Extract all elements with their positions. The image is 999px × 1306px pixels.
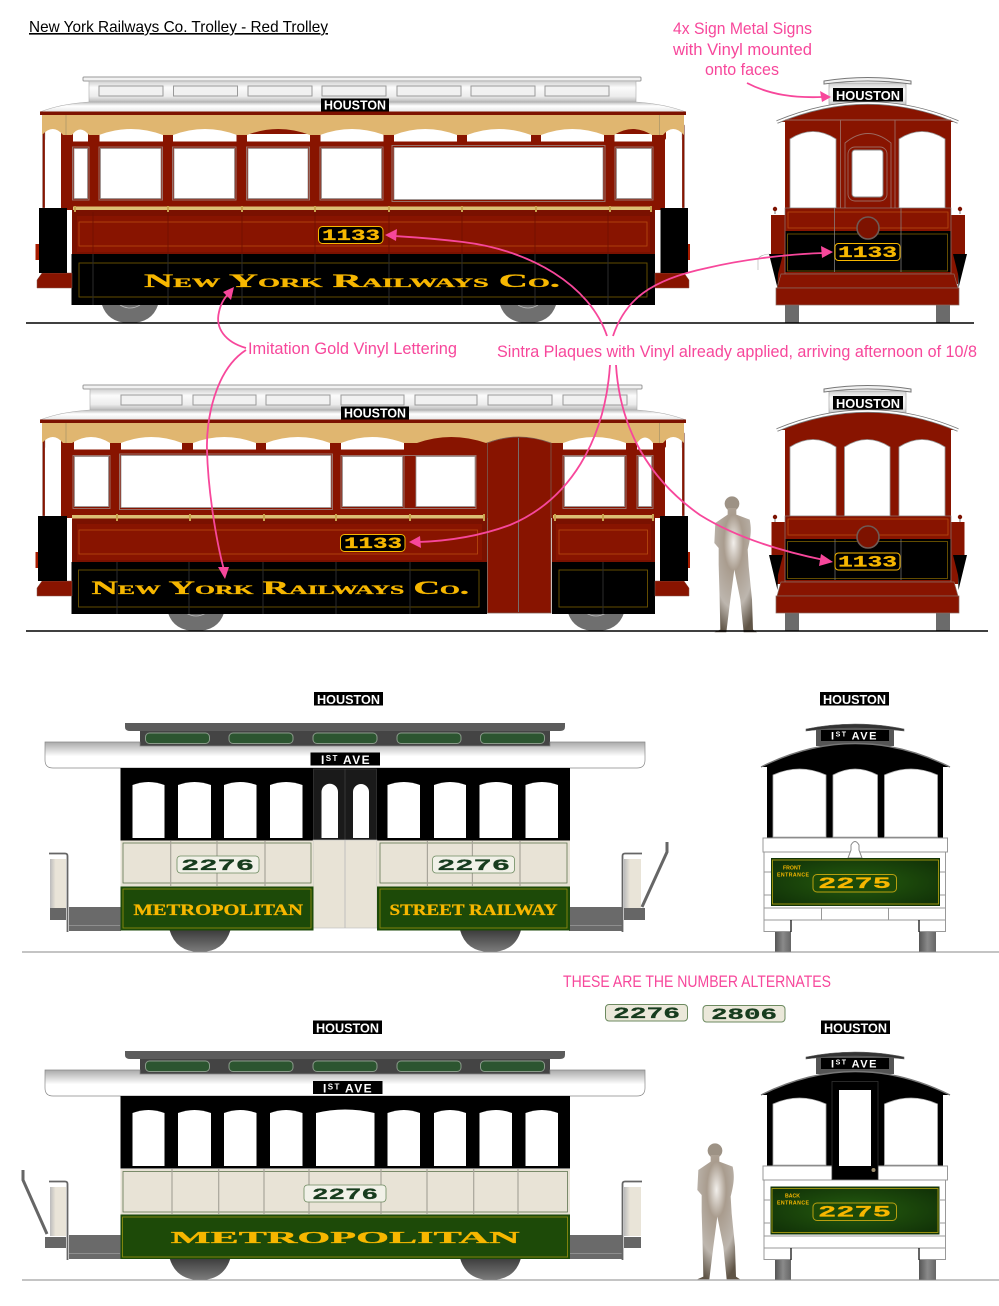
valance bbox=[42, 423, 684, 443]
alternate plaque 2806 bbox=[703, 1006, 785, 1024]
sign above: HOUSTON bbox=[316, 1022, 379, 1036]
route sign: ST bbox=[326, 754, 339, 763]
panel seams bbox=[93, 212, 608, 305]
green panel bbox=[771, 858, 940, 906]
body wall and open platforms bbox=[42, 115, 684, 210]
windows bbox=[790, 440, 945, 516]
figure: human scale 2 bbox=[697, 1143, 740, 1279]
arrow: plaque side 2 bbox=[409, 365, 610, 548]
black wall bbox=[761, 744, 950, 838]
black name panels bbox=[72, 562, 655, 614]
roof cap: AVE bbox=[848, 1058, 878, 1070]
end door bbox=[785, 120, 951, 208]
legs bbox=[785, 613, 950, 631]
route sign: ST bbox=[328, 1082, 341, 1092]
lettering: STREET RAILWAY bbox=[390, 902, 558, 919]
ground line 3 bbox=[22, 951, 999, 953]
route sign: I bbox=[323, 1082, 328, 1096]
roof cap: AVE bbox=[848, 730, 878, 742]
green trolley 1 front view bbox=[761, 692, 950, 952]
number plaque bbox=[813, 1203, 896, 1222]
green trolley 2 front view bbox=[761, 1020, 950, 1280]
number plaque: 2276 bbox=[312, 1186, 378, 1204]
arrows bbox=[207, 83, 833, 579]
valance bbox=[42, 115, 684, 135]
letter board panels bbox=[72, 518, 655, 562]
arrow: lettering upper bbox=[218, 287, 246, 348]
ground line 1 bbox=[26, 322, 974, 324]
wheels bbox=[170, 930, 521, 952]
metal sign: HOUSTON bbox=[836, 88, 900, 103]
legs bbox=[785, 305, 950, 323]
red trolley 1 front view bbox=[758, 78, 967, 323]
center door lower bbox=[313, 840, 377, 928]
alternate plaque 2276: 2276 bbox=[613, 1005, 680, 1023]
company lettering: New York Railways Co. bbox=[92, 579, 469, 599]
ground line 2 bbox=[26, 630, 988, 632]
wall bbox=[779, 104, 956, 208]
windows bbox=[773, 769, 938, 837]
green panel bbox=[770, 1186, 940, 1234]
bumper bbox=[776, 274, 959, 305]
label: sintra plaques: Sintra Plaques with Vinyl already applied, arriving afternoon of 10/8 bbox=[497, 343, 977, 361]
roof cap: I bbox=[831, 1058, 836, 1070]
clerestory bbox=[140, 1059, 550, 1074]
green trolley 1 side view bbox=[45, 692, 667, 952]
green trolley 2 side view bbox=[23, 1020, 645, 1280]
letter board panel bbox=[72, 210, 655, 254]
wheels bbox=[170, 1258, 521, 1280]
platform frames bbox=[49, 842, 667, 932]
sign above: HOUSTON bbox=[823, 693, 886, 707]
windows bbox=[773, 1098, 938, 1165]
roof cap: I bbox=[831, 730, 836, 742]
wheels bbox=[168, 613, 624, 631]
sign above: HOUSTON bbox=[317, 693, 380, 707]
green panel: ENTRANCE bbox=[777, 1200, 810, 1206]
roof cap: ST bbox=[836, 1060, 848, 1066]
brass rails bbox=[72, 514, 654, 521]
center door bbox=[488, 437, 551, 613]
sign above: HOUSTON bbox=[824, 1022, 887, 1036]
ground line 4 bbox=[22, 1279, 999, 1281]
roof cap bbox=[806, 1052, 904, 1074]
callout: metal signs note bbox=[672, 20, 812, 79]
alternate plaque 2806: 2806 bbox=[711, 1006, 777, 1024]
red trolley 1 side view bbox=[36, 77, 690, 323]
body wall and windows bbox=[42, 423, 684, 518]
lettering: METROPOLITAN bbox=[134, 902, 304, 919]
arrow: plaque side 1 bbox=[385, 229, 607, 336]
roof cap: ST bbox=[836, 732, 848, 738]
green panel bbox=[120, 1214, 570, 1259]
dash bbox=[769, 515, 967, 590]
number plaque bbox=[340, 534, 405, 553]
clerestory bbox=[140, 731, 550, 746]
white dash outlines bbox=[763, 838, 948, 932]
black window wall bbox=[120, 1096, 570, 1168]
bumper bbox=[776, 582, 959, 613]
black window wall bbox=[120, 768, 570, 840]
number plaque: 2275 bbox=[818, 875, 891, 893]
cream panel bbox=[120, 1169, 570, 1214]
cream panels bbox=[120, 840, 570, 886]
metal sign: HOUSTON bbox=[836, 396, 900, 411]
brass rail bbox=[73, 206, 652, 212]
company lettering: New York Railways Co. bbox=[144, 272, 560, 292]
wheels bbox=[102, 305, 556, 323]
route sign: I bbox=[321, 753, 326, 767]
dash bbox=[758, 207, 967, 288]
number plaque: 1133 bbox=[838, 244, 897, 262]
wall bbox=[779, 412, 956, 516]
roof sign: HOUSTON bbox=[324, 98, 386, 112]
route sign bbox=[313, 1081, 382, 1096]
arrow: lettering lower bbox=[207, 350, 246, 579]
callout: metal signs note: 4x Sign Metal Signs bbox=[673, 20, 812, 38]
white end openings bbox=[45, 133, 682, 208]
route sign: AVE bbox=[339, 753, 371, 767]
roof cap and clerestory bbox=[824, 78, 911, 107]
green panel: FRONT bbox=[783, 866, 802, 872]
red trolley 2 side view bbox=[36, 385, 690, 631]
roof cap bbox=[806, 724, 904, 746]
roof bbox=[45, 1070, 645, 1096]
number plaque: 2275 bbox=[818, 1204, 891, 1222]
end bumpers bbox=[36, 516, 690, 596]
black name panel bbox=[72, 254, 655, 305]
number plaque: 1133 bbox=[838, 554, 897, 572]
route sign bbox=[310, 752, 380, 767]
legs bbox=[775, 1248, 936, 1280]
label: imitation gold: Imitation Gold Vinyl Lettering bbox=[248, 340, 457, 358]
number plaque bbox=[304, 1185, 386, 1204]
route sign: AVE bbox=[341, 1082, 373, 1096]
red trolley 2 front view bbox=[769, 386, 967, 631]
green panel: BACK bbox=[785, 1194, 800, 1200]
number plaque: 1133 bbox=[322, 227, 380, 245]
green panels bbox=[120, 886, 570, 930]
roof cap and clerestory bbox=[824, 386, 911, 415]
number plaque bbox=[813, 874, 896, 893]
lettering: METROPOLITAN bbox=[171, 1228, 520, 1247]
white dash outlines bbox=[763, 1166, 948, 1260]
clerestory roof bbox=[40, 385, 686, 423]
ornament bbox=[848, 842, 862, 858]
clerestory roof bbox=[40, 77, 686, 115]
number plaque bbox=[318, 226, 383, 245]
roof bbox=[45, 742, 645, 768]
legs bbox=[775, 920, 936, 952]
white end openings bbox=[45, 441, 682, 516]
figure: human scale 1 bbox=[714, 496, 757, 632]
arrow: plaque front 1 bbox=[613, 246, 833, 336]
alternate plaque 2276 bbox=[606, 1004, 688, 1023]
number plaques: 2276 bbox=[437, 857, 510, 875]
green panel: ENTRANCE bbox=[777, 872, 810, 878]
upper roof bbox=[125, 1051, 565, 1059]
platform frames bbox=[23, 1170, 642, 1260]
number plaques bbox=[177, 856, 514, 875]
arrow: plaque front 2 bbox=[616, 365, 833, 566]
title: New York Railways Co. Trolley - Red Trolley bbox=[29, 19, 328, 36]
callout: metal signs note: onto faces bbox=[705, 61, 779, 79]
number plaque: 1133 bbox=[344, 535, 402, 553]
back door bbox=[832, 1082, 878, 1180]
callout: metal signs note: with Vinyl mounted bbox=[672, 41, 812, 59]
end windows bbox=[790, 132, 945, 208]
upper roof bbox=[125, 723, 565, 731]
roof sign: HOUSTON bbox=[344, 406, 406, 420]
black wall bbox=[761, 1072, 950, 1166]
arrow: metal sign bbox=[747, 83, 831, 102]
number plaques: 2276 bbox=[181, 857, 254, 875]
number plaque bbox=[835, 553, 900, 572]
lettering bbox=[134, 902, 558, 919]
number plaque bbox=[835, 244, 900, 262]
end bumpers bbox=[36, 208, 690, 288]
note: number alternates: THESE ARE THE NUMBER ALTERNATES bbox=[563, 973, 831, 991]
